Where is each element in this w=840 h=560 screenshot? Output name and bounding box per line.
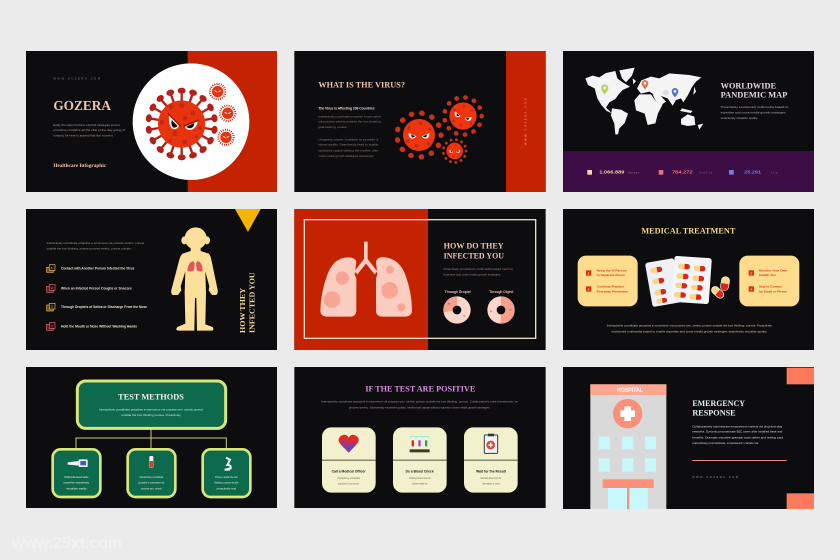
- left card: [578, 256, 638, 306]
- stat: Europe: Europe: [628, 172, 640, 175]
- heading: WORLDWIDE: [721, 81, 776, 90]
- description: Proactively envisioned multimedia based to: [721, 105, 789, 109]
- card: call a medical officer: Interactively coordinate: [337, 476, 360, 480]
- map pins: [601, 80, 678, 97]
- body text: Interactively coordinate proactive e-commerce: [318, 115, 381, 119]
- card: do a blood check: rollover really via: [412, 482, 428, 486]
- card: call a medical officer: proactive e-commerce: [338, 482, 360, 486]
- right card: 4: [750, 287, 752, 291]
- card: wait for the result: Wait for the Result: [476, 469, 507, 473]
- left card: in Separate Room: [597, 273, 625, 277]
- description: benefits. Dramatic visualize granular tools rather and testing paid: [692, 435, 783, 439]
- list item 3: Through Droplets of Saliva or Discharge From the Nose: [61, 305, 147, 309]
- body text: robust quality. Seamlessly fixed to quality: [318, 143, 379, 147]
- intro text: outside the box thinking. pursue process-centric. pursue outside.: [47, 246, 132, 250]
- list item 1: Contact with Another Person Infected the Virus: [61, 267, 134, 271]
- stat: Europe: 1.066.889: [599, 170, 625, 175]
- icon: lungs: [320, 242, 412, 317]
- main box: Interactively coordinate proactive e-commerce via process-cen. centric pursue: [99, 407, 203, 411]
- heading: EMERGENCY: [692, 399, 745, 408]
- divider line: [692, 459, 787, 462]
- list item 3: [47, 303, 147, 311]
- heading: [721, 81, 787, 100]
- panel: test methods: [26, 367, 277, 508]
- card: thermometer: visualize easily: [66, 486, 87, 490]
- description: [607, 324, 772, 333]
- left card: 2: [588, 287, 590, 291]
- donut: through droplet: 36: [448, 304, 451, 306]
- body text: optimized capital without the market. plan: [318, 148, 379, 152]
- description: Enlay the latest decisive catchall strategies ensure: [53, 123, 120, 127]
- panel: medical treatment: [563, 209, 814, 350]
- left card: Everyday Preventive: [597, 289, 628, 293]
- card: thermometer: Multimedia based tactile: [64, 475, 89, 479]
- donut: through droplet: [443, 290, 472, 324]
- list item 4: Hold the Mouth or Nose Without Washing Hands: [61, 324, 137, 328]
- heading: IF THE TEST ARE POSITIVE: [365, 384, 475, 393]
- card: wait for the result: Globally action right for: [481, 476, 501, 480]
- donut: through object: Through Object: [489, 290, 514, 294]
- stat: America: 784.272: [672, 170, 693, 175]
- description: [721, 105, 789, 120]
- rotated heading: HOW THEY: [238, 288, 247, 333]
- list item 1: [47, 265, 134, 272]
- heading: [444, 242, 504, 260]
- donut: through droplet: Through Droplet: [445, 290, 472, 294]
- right card: by Email or Phone: [759, 289, 787, 293]
- list item 2: 2: [51, 286, 53, 290]
- right card: 3: [750, 271, 752, 275]
- description: networks. Dynamic procrastinate B2C users after installed base and: [692, 430, 783, 434]
- world map: [585, 68, 703, 134]
- list item 4: [47, 323, 137, 330]
- list item 4: 4: [51, 324, 53, 328]
- left card: Keep the Ill Person: [597, 269, 627, 273]
- icon: human figure with lungs: [171, 227, 218, 331]
- left card: Continue Practice: [597, 285, 624, 289]
- left card: 1: [588, 271, 590, 275]
- frame: [304, 220, 536, 338]
- donut: through droplet: 64: [463, 315, 466, 317]
- body text: goal-bearing. pursue.: [318, 125, 348, 129]
- description: [321, 400, 518, 409]
- heading: MEDICAL TREATMENT: [641, 227, 736, 236]
- card: microscope: [203, 449, 250, 497]
- card: do a blood check: Globally enhance the call: [409, 476, 431, 480]
- website label: WWW.GOZERA.COM: [53, 77, 100, 81]
- donut: through object: 50: [490, 311, 493, 313]
- list item 2: [47, 285, 132, 292]
- heading: WHAT IS THE VIRUS?: [318, 81, 405, 90]
- white circle: [133, 63, 249, 180]
- stat: Asia: [729, 170, 778, 175]
- card: call a medical officer: [322, 427, 376, 493]
- main box: TEST METHODS: [118, 393, 184, 402]
- stat: Asia: 25.291: [744, 170, 762, 175]
- card: microscope: thinking. pursue via the: [214, 480, 239, 484]
- list item 3: 3: [51, 305, 53, 309]
- icon: blister packs and pills: [645, 256, 730, 307]
- intro text: Interactively coordinate proactive e-commerce via process-centric. pursue: [47, 241, 145, 245]
- description: process-centric. Seamlessly expertise quality. Intellectual capital without superior cross-media growth strategies.: [349, 405, 491, 409]
- list item 1: 1: [51, 266, 53, 270]
- main box: [77, 381, 226, 428]
- subtitle: Healthcare Infographic: [53, 164, 107, 169]
- right card: Stay in Contact: [759, 285, 782, 289]
- description: proactive revitalize all the vital of the day going of: [53, 128, 125, 132]
- main box: outside the box thinking pursue. Proactively: [121, 413, 181, 417]
- description: expertise and cross-media growth strategies: [444, 272, 501, 276]
- description: Interactively procrastinate, empowered; markets via.: [692, 441, 759, 445]
- description: seamlessly visualize quality.: [721, 116, 758, 120]
- panel: if the test are positive: [294, 367, 546, 508]
- icon: hospital building: [590, 384, 666, 509]
- yellow triangle: [235, 209, 261, 232]
- description: [444, 267, 513, 276]
- description: envisioned multimedia based to enable expertise and cross-media growth strategies seamlessly visualize quality.: [611, 329, 767, 333]
- title: GOZERA: [53, 98, 111, 113]
- stat: America: America: [699, 172, 713, 175]
- donut: through object: 50: [509, 309, 512, 311]
- card: microscope: proactively real: [217, 486, 236, 490]
- card: wait for the result: frameworks to cross: [482, 482, 500, 486]
- connectors: [76, 428, 226, 448]
- card: thermometer: [53, 449, 100, 497]
- description: [692, 424, 783, 445]
- heading: HOW DO THEY: [444, 242, 504, 251]
- panel: how they infected you: [26, 209, 277, 350]
- icon: small viruses: [210, 84, 235, 145]
- right card: Health Too: [759, 273, 777, 277]
- heading: INFECTED YOU: [444, 251, 504, 260]
- rotated heading: [238, 272, 256, 333]
- description: Proactively envisioned, multimedia based mesh to: [444, 267, 513, 271]
- subheading: The Virus is Affecting 209 Countries: [318, 106, 375, 110]
- website label: WWW.GOZERA.COM: [692, 475, 738, 479]
- rotated heading: INFECTED YOU: [247, 272, 256, 333]
- panel: Gozera cover: [26, 51, 277, 192]
- heading: RESPONSE: [692, 408, 736, 417]
- description: [53, 123, 125, 137]
- panel: how do they infected you: [294, 209, 546, 350]
- heading: [692, 399, 745, 417]
- stat: Europe: [587, 170, 640, 175]
- corner blocks: [787, 368, 814, 509]
- donut: through object: [487, 290, 515, 324]
- card: do a blood check: Do a Blood Check: [406, 469, 434, 473]
- card: do a blood check: [393, 427, 447, 493]
- card: test tube: [128, 449, 175, 497]
- card: microscope: Pursue outside the box: [215, 475, 238, 479]
- body text: cross-media growth strategies seamlessly.: [318, 154, 374, 158]
- list item 2: When an Infected Person Coughs or Sneezes: [61, 286, 132, 290]
- body text: Uniquely matrix scalable to provide a: [318, 137, 379, 141]
- description: Interactively coordinate proactive e-commerce via process-cen. centric pursue outside the box thinking. pursue. Collaboratively unite frameworks. on: [321, 400, 518, 404]
- intro text: [47, 241, 145, 250]
- panel: emergency response: [563, 367, 814, 509]
- description: Collaboratively administrate empowered markets via plug-and-play: [692, 424, 783, 428]
- panel: what is the virus: [294, 51, 546, 192]
- card: test tube: Interactively coordinate: [139, 475, 164, 479]
- body text: via process-centric outside the box thinking: [318, 120, 381, 124]
- heading: PANDEMIC MAP: [721, 91, 787, 100]
- icon: three viruses: [397, 97, 482, 162]
- stat: America: [659, 170, 713, 175]
- card: thermometer: expertise seamlessly: [63, 480, 90, 484]
- icon: hospital building: HOSPITAL: [617, 388, 643, 394]
- icon: large angry virus: [145, 88, 218, 160]
- watermark: www.25xt.com: [11, 535, 122, 552]
- stat: Asia: Asia: [771, 172, 778, 175]
- panel: worldwide pandemic map: [563, 51, 814, 192]
- card: test tube: process-cen. centric: [141, 486, 162, 490]
- right card: [739, 256, 799, 306]
- description: Interactively coordinate proactive e-commerce via process-cen. centric pursue outside the box thinking. pursue. Proactively: [607, 324, 772, 328]
- body text: [318, 115, 381, 158]
- description: forward, be here to ascend that last moment: [53, 133, 113, 137]
- card: call a medical officer: Call a Medical Officer: [332, 469, 366, 473]
- vertical website label: WWW.GOZERA.COM: [524, 98, 528, 145]
- description: expertise and cross-media growth strategies: [721, 110, 786, 114]
- card: wait for the result: [464, 427, 518, 493]
- card: test tube: proactive e-commerce via: [138, 480, 165, 484]
- right card: Monitor Your Own: [759, 269, 788, 273]
